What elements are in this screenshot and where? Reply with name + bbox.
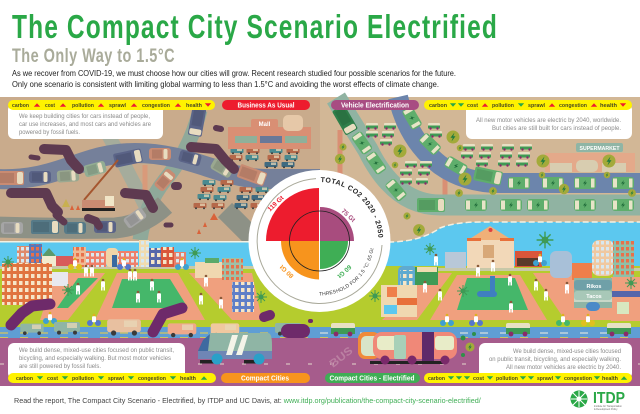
ev roads — [336, 97, 640, 215]
panel: vehicle electrification — [320, 97, 640, 242]
indicator bar: compact cities — [8, 373, 216, 383]
heading: total co2: TOTAL CO2 2020 - 2050 — [320, 177, 384, 238]
indicator bar: vehicle electrification: cost — [467, 103, 478, 109]
footer text: Read the report, The Compact City Scenario - Electrified, by ITDP and UC Davis, at: www.itdp.org/publication/the-compact-city-scenario-electrified/ — [14, 396, 481, 405]
indicator bar: compact cities: pollution — [72, 376, 95, 382]
threshold circle — [290, 211, 350, 271]
road network — [0, 110, 320, 240]
indicator bar: business as usual: pollution — [72, 103, 95, 109]
supermarket: SUPERMARKET — [580, 146, 620, 152]
indicator bar: compact cities electrified: cost — [473, 376, 484, 382]
supermarket — [545, 143, 635, 172]
indicator bar: vehicle electrification: carbon — [429, 103, 448, 109]
subtitle: The Only Way to 1.5°C — [12, 46, 175, 67]
pollution clouds — [11, 128, 234, 226]
buildings: Rikos — [587, 284, 601, 290]
text box: business as usual: We keep building cities for cars instead of people, — [19, 113, 150, 120]
buildings: Tacos — [586, 294, 602, 300]
text box: compact cities electrified: on public transit, bicycling, and especially walking. — [489, 356, 621, 363]
ITDP logo — [570, 390, 625, 411]
indicator bar: compact cities electrified — [424, 373, 632, 383]
text box: compact cities: bicycling, and especially walking. But most motor vehicles — [19, 355, 172, 362]
panel: compact cities — [0, 240, 320, 338]
ITDP logo: ITDP — [593, 390, 625, 407]
indicator bar: vehicle electrification — [424, 100, 632, 110]
bottom band — [0, 338, 640, 386]
text box: vehicle electrification: All new motor vehicles are electric by 2040, worldwide. — [476, 117, 621, 124]
indicator bar: business as usual: health — [186, 103, 203, 109]
trees and people — [369, 232, 637, 326]
text box: compact cities electrified: We build dense, mixed-use cities focused — [513, 348, 621, 355]
indicator bar: compact cities: carbon — [16, 376, 34, 382]
indicator bar: business as usual: congestion — [142, 103, 171, 109]
text box: compact cities — [8, 343, 185, 379]
indicator bar: business as usual: carbon — [12, 103, 30, 109]
label: compact cities electrified: Compact Cities - Electrified — [330, 376, 414, 382]
indicator bar: compact cities electrified: sprawl — [537, 376, 553, 382]
cars on road — [20, 319, 301, 337]
plazas — [382, 273, 640, 320]
charging stations — [335, 130, 636, 236]
text box: compact cities electrified — [479, 343, 632, 379]
text box: compact cities: are still powered by fossil fuels. — [19, 363, 101, 370]
text box: business as usual: car use increases, and most cars and vehicles are — [19, 121, 151, 128]
label: compact cities — [221, 373, 310, 383]
text box: compact cities: We build dense, mixed-use cities focused on public transit, — [19, 347, 174, 354]
text box: vehicle electrification — [466, 104, 632, 139]
value: 119 Gt: 119 Gt — [267, 194, 286, 213]
indicator bar: compact cities electrified: health — [602, 376, 619, 382]
indicator bar: business as usual — [8, 100, 215, 110]
main road — [320, 327, 640, 338]
value: 75 Gt: 75 Gt — [340, 208, 357, 224]
indicator bar: compact cities electrified: carbon — [428, 376, 446, 382]
chargers near tram — [460, 332, 476, 357]
mall: Mall — [259, 122, 271, 128]
label: compact cities: Compact Cities — [241, 376, 289, 382]
intro text: Only one scenario is consistent with limiting global warming to less than 1.5°C and avoiding the worst effects of climate change. — [12, 79, 439, 89]
indicator bar: compact cities: congestion — [138, 376, 167, 382]
indicator bar: vehicle electrification: sprawl — [528, 103, 545, 109]
indicator bar: vehicle electrification: congestion — [559, 103, 588, 109]
indicator bar: vehicle electrification: pollution — [492, 103, 515, 109]
text box: business as usual: powered by fossil fuels. — [19, 129, 80, 136]
orange quarter: compact cities — [281, 241, 319, 280]
text box: compact cities electrified: All new motor vehicles are electric by 2040. — [506, 364, 621, 371]
red quarter: business as usual — [266, 188, 319, 241]
value: 60 Gt: 60 Gt — [335, 263, 352, 280]
intro text — [12, 68, 456, 89]
value: 80 Gt: 80 Gt — [278, 263, 295, 279]
trees and people — [2, 247, 267, 326]
indicator bar: business as usual: sprawl — [109, 103, 126, 109]
buildings — [2, 240, 254, 312]
label: vehicle electrification: Vehicle Electrification — [341, 102, 409, 110]
parked electric cars — [366, 123, 532, 185]
label: business as usual: Business As Usual — [238, 102, 295, 110]
green quarter: compact cities electrified — [320, 241, 348, 269]
indicator bar: compact cities electrified: pollution — [496, 376, 519, 382]
indicator bar: compact cities: health — [180, 376, 197, 382]
main road — [0, 327, 320, 338]
electric cars on road — [331, 323, 631, 336]
label: vehicle electrification — [331, 100, 419, 110]
bus — [198, 333, 272, 364]
panel: business as usual — [0, 97, 320, 242]
indicator bar: business as usual: cost — [45, 103, 55, 109]
buildings — [381, 226, 640, 321]
label: business as usual — [222, 100, 310, 110]
electric tram — [358, 332, 457, 364]
parked cars — [194, 148, 300, 209]
ITDP logo: Institute for Transportation — [594, 405, 622, 408]
label: compact cities electrified — [325, 373, 420, 383]
purple quarter: vehicle electrification — [320, 207, 354, 241]
road marking: bus: BUS — [327, 345, 355, 370]
text box: vehicle electrification: But cities are still built for cars instead of people. — [492, 125, 621, 132]
indicator bar: compact cities: sprawl — [108, 376, 124, 382]
electric vehicles — [332, 104, 634, 212]
intro text: As we recover from COVID-19, we must choose how our cities will grow. Recent research studied four possible scenarios for the future. — [12, 68, 456, 78]
ITDP logo: & Development Policy — [594, 408, 618, 411]
vehicles on road — [0, 107, 268, 234]
mall — [228, 115, 311, 149]
panel: compact cities electrified — [320, 222, 640, 338]
text box: business as usual — [8, 104, 163, 139]
pollution clouds — [11, 304, 311, 332]
plazas — [40, 273, 262, 320]
indicator bar: vehicle electrification: health — [600, 103, 618, 109]
crane truck — [62, 160, 218, 234]
indicator bar: compact cities: cost — [47, 376, 58, 382]
indicator bar: compact cities electrified: congestion — [564, 376, 593, 382]
central CO2 chart — [248, 170, 390, 312]
threshold label: THRESHOLD FOR 1.5 °C: 65 Gt — [319, 248, 374, 296]
